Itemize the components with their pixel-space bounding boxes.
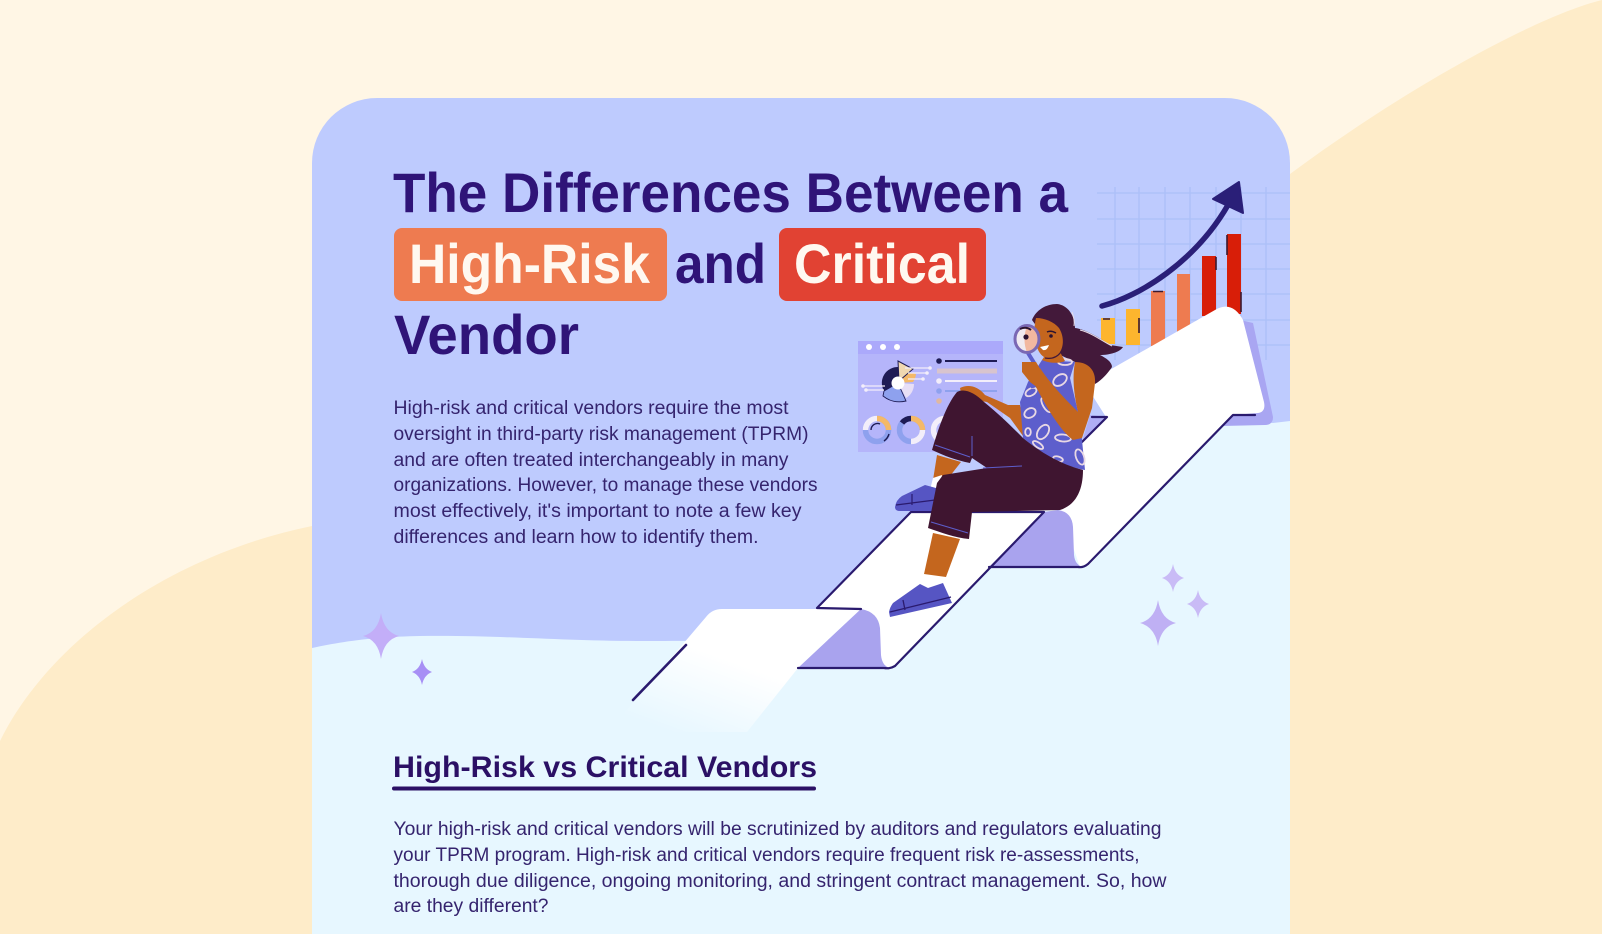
middle ribbon section <box>817 512 1044 668</box>
top pattern <box>1023 359 1086 466</box>
back lower leg <box>933 455 961 480</box>
person with magnifying glass <box>889 304 1123 617</box>
light lower section wave <box>312 418 1290 934</box>
badge: Critical: Critical <box>794 232 970 295</box>
fold shadows <box>989 510 1083 567</box>
hair <box>1032 304 1123 384</box>
section paragraph: thorough due diligence, ongoing monitoring, and stringent contract management. So, how <box>394 871 1167 892</box>
donut charts <box>866 418 956 442</box>
sparkle: left small <box>412 659 432 685</box>
top <box>1020 360 1085 470</box>
intro paragraph: organizations. However, to manage these vendors <box>394 475 818 496</box>
back arm <box>960 386 1023 436</box>
title: and <box>675 232 766 295</box>
title: Vendor <box>394 303 579 366</box>
sparkle: left big <box>363 613 399 659</box>
chart: rising bars and arrow <box>1097 182 1290 360</box>
section paragraph: your TPRM program. High-risk and critical vendors require frequent risk re-assessments, <box>394 845 1140 866</box>
title <box>393 161 1069 366</box>
arm with elbow <box>1035 362 1095 440</box>
trousers <box>928 390 1083 539</box>
intro paragraph <box>394 398 818 548</box>
arrow head shadow <box>1222 320 1273 426</box>
ribbon outlines <box>633 415 1255 700</box>
upper ribbon and arrow head <box>1020 307 1264 567</box>
badge: High-Risk: High-Risk <box>409 232 651 295</box>
front shoe <box>889 583 952 617</box>
hand <box>1022 362 1040 386</box>
intro paragraph: and are often treated interchangeably in many <box>394 450 789 471</box>
dashboard panel <box>858 341 1003 452</box>
intro paragraph: High-risk and critical vendors require the most <box>394 398 789 419</box>
sparkle: right small <box>1187 590 1209 618</box>
section paragraph: Your high-risk and critical vendors will be scrutinized by auditors and regulators evaluating <box>394 819 1162 840</box>
sparkle: right big <box>1140 600 1176 646</box>
magnifying glass <box>1015 326 1039 388</box>
arrow ribbon <box>608 307 1273 732</box>
sparkle: right top <box>1162 564 1184 592</box>
title: The Differences Between a <box>393 161 1069 224</box>
section paragraph <box>394 819 1167 917</box>
section paragraph: are they different? <box>394 896 548 917</box>
lower ribbon section <box>645 609 860 728</box>
back shoe <box>895 485 936 511</box>
pie chart <box>861 361 932 402</box>
face and neck <box>1034 318 1065 363</box>
legend lines <box>936 358 997 404</box>
intro paragraph: differences and learn how to identify them. <box>394 527 758 548</box>
front leg <box>924 533 960 577</box>
shadow patch behind shirt <box>1082 415 1104 440</box>
section heading: High-Risk vs Critical Vendors <box>393 751 817 784</box>
intro paragraph: oversight in third-party risk management (TPRM) <box>394 424 808 445</box>
intro paragraph: most effectively, it's important to note a few key <box>394 501 802 522</box>
panel: card <box>312 98 1290 934</box>
